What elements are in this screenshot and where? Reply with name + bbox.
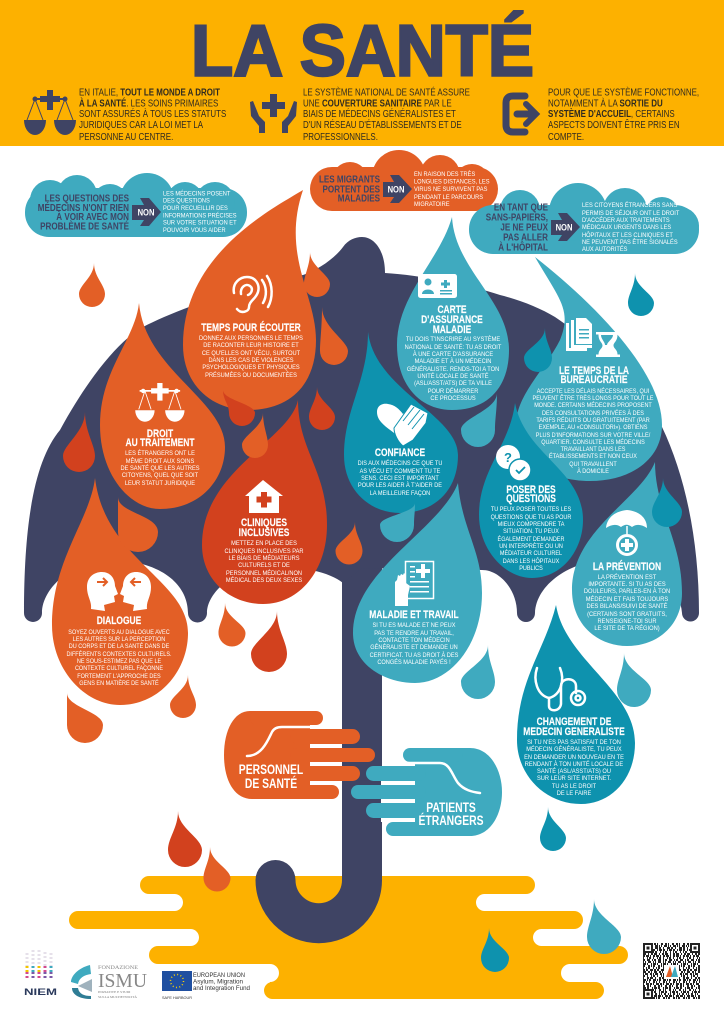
heading: CONFIANCE xyxy=(375,447,426,459)
cloud heading: MÉDECINS N'ONT RIEN xyxy=(38,202,129,213)
body text: SENS. CECI EST IMPORTANT xyxy=(361,476,439,482)
cloud body: PENDANT LE PARCOURS xyxy=(414,195,483,201)
body text: DANS LES HÔPITAUX xyxy=(503,558,559,565)
body text: PEUVENT ÊTRE TRÈS LONGS POUR TOUT LE xyxy=(533,394,654,402)
logo: European Union: and Integration Fund xyxy=(193,985,250,992)
body text: CONGÉS MALADIE PAYÉS ! xyxy=(377,659,451,666)
body text: SI TU ES MALADE ET NE PEUX xyxy=(372,623,456,629)
heading: MALADIE ET TRAVAIL xyxy=(369,609,459,621)
icon: umbrella and cross xyxy=(606,510,647,554)
body text: UNITÉ LOCALE DE SANTÉ xyxy=(417,373,489,380)
cloud body: POUVOIR VOUS AIDER xyxy=(163,228,226,234)
heading: TEMPS POUR ÉCOUTER xyxy=(201,321,301,334)
body text: MÊME DROIT AUX SOINS xyxy=(126,457,194,465)
body text: MONDE. CERTAINS MÉDECINS PROPOSENT xyxy=(534,402,652,409)
body text: DIS AUX MÉDECINS CE QUE TU xyxy=(358,460,442,467)
body text: DANS LES CAS DE VIOLENCES xyxy=(208,358,294,364)
header text: middle: LE SYSTÈME NATIONAL DE SANTÉ ASSURE xyxy=(303,87,470,98)
header text: left: JURIDIQUES CAR LA LOI MET LA xyxy=(79,119,203,130)
body text: LE SITE DE TA RÉGION) xyxy=(594,625,660,632)
body text: SOYEZ OUVERTS AU DIALOGUE AVEC xyxy=(68,630,170,636)
body text: ACCEPTE LES DÉLAIS NÉCESSAIRES, QUI xyxy=(537,388,650,395)
logo: NIEM: NIEM xyxy=(24,987,57,998)
cloud body: MIGRATOIRE xyxy=(414,202,450,208)
header text: left: . LES SOINS PRIMAIRES xyxy=(126,98,218,109)
decorative dark teal drops xyxy=(481,273,682,972)
body text: RENDANT À TON UNITÉ LOCALE DE xyxy=(525,761,623,768)
cloud: migrants myth xyxy=(310,150,498,211)
heading: CARTE xyxy=(437,304,467,316)
header text: middle: COUVERTURE SANITAIRE PAR LE xyxy=(322,98,452,109)
body text: TARIFS RÉDUITS OU GRATUITEMENT (PAR xyxy=(536,417,650,424)
icon: clinic house xyxy=(245,480,283,513)
header text: right: ASPECTS DOIVENT ÊTRE PRIS EN xyxy=(548,119,680,130)
body text: CERTIFICAT. TU AS DROIT À DES xyxy=(370,652,458,659)
cloud heading: À VOIR AVEC MON xyxy=(56,211,129,222)
header text: middle: BIAIS DE MÉDECINS GÉNÉRALISTES ET xyxy=(303,108,456,119)
body text: CITOYENS, QUEL QUE SOIT xyxy=(122,473,199,479)
icon: chat bubbles xyxy=(496,445,531,481)
body text: GENS EN MATIÈRE DE SANTÉ xyxy=(79,680,159,687)
body text: (CERTAINS SONT GRATUITS, xyxy=(587,612,667,618)
logo: European Union: SAFE HARBOUR xyxy=(162,996,192,1000)
decorative orange drops xyxy=(67,252,362,892)
non arrow xyxy=(551,213,580,241)
body text: QUI TRAVAILLENT xyxy=(569,462,617,468)
header text: right: POUR QUE LE SYSTÈME FONCTIONNE, xyxy=(548,87,699,98)
heading: AU TRAITEMENT xyxy=(125,437,195,449)
cloud body: HÔPITAUX ET LES CLINIQUES ET xyxy=(582,232,673,239)
panel: la prévention xyxy=(572,462,682,646)
body text: MÉDECIN GÉNÉRALISTE, TU PEUX xyxy=(526,746,622,753)
body text: SUR LEUR SITE INTERNET. xyxy=(537,776,611,782)
cloud body: NE PEUVENT PAS ÊTRE SIGNALÉS xyxy=(582,238,678,246)
body text: NE SOUS-ESTIMEZ PAS QUE LE xyxy=(77,659,161,665)
heading: CLINIQUES xyxy=(241,517,287,529)
body text: TRAVAILLANT DANS LES xyxy=(561,447,626,453)
body text: GÉNÉRALISTE. RENDS-TOI A TON xyxy=(407,366,499,373)
cloud body: AUX AUTORITÉS xyxy=(582,246,628,253)
heading: LE TEMPS DE LA xyxy=(559,365,629,377)
panel: carte d'assurance maladie xyxy=(397,217,509,410)
body text: AS VÉCU ET COMMENT TU TE xyxy=(360,468,440,475)
body text: NATIONAL DE SANTÉ: TU AS DROIT xyxy=(405,344,502,351)
body text: PLUS D'INFORMATIONS SUR VOTRE VILLE/ xyxy=(536,433,651,439)
logo: Fondazione ISMU: ISMU xyxy=(98,970,148,992)
header text: right: SORTIE DU xyxy=(620,98,663,109)
body text: DES CONSULTATIONS PRIVÉES À DES xyxy=(542,410,644,417)
cloud: undocumented myth xyxy=(469,183,699,254)
logo: Fondazione ISMU: FONDAZIONE xyxy=(98,965,139,971)
decorative teal drops xyxy=(380,393,651,954)
body text: DE LE FAIRE xyxy=(557,791,591,797)
body text: RENSEIGNE-TOI SUR xyxy=(597,619,657,625)
heading: LA PRÉVENTION xyxy=(593,560,661,573)
logo: European Union: Asylum, Migration xyxy=(193,978,243,986)
body text: MALADIE ET À UN MÉDECIN xyxy=(415,358,491,365)
cloud body: LONGUES DISTANCES, LES xyxy=(414,179,490,186)
header text: middle: UNE xyxy=(303,98,322,109)
body text: UN INTERPRÈTE OU UN xyxy=(499,543,563,550)
heading: BUREAUCRATIE xyxy=(560,374,628,386)
icon: scales xyxy=(135,383,185,422)
body text: MÉDECIN ET FAIS TOUJOURS xyxy=(586,596,668,603)
cloud heading: EN TANT QUE xyxy=(494,202,548,213)
label: PERSONNEL xyxy=(239,761,304,777)
title: LA SANTÉ xyxy=(191,12,534,92)
body text: LA PRÉVENTION EST xyxy=(598,574,657,581)
body text: METTEZ EN PLACE DES xyxy=(231,541,297,547)
header text: middle: D'UN RÉSEAU D'ÉTABLISSEMENTS ET DE xyxy=(303,119,462,130)
heading: DROIT xyxy=(147,428,173,440)
body text: À UNE CARTE D'ASSURANCE xyxy=(413,351,493,358)
heading: MALADIE xyxy=(433,324,472,336)
cloud body: LES MÉDECINS POSENT xyxy=(163,190,231,198)
cloud heading: JE NE PEUX xyxy=(500,222,548,233)
icon: heart and hand xyxy=(377,404,428,446)
header text: right: SYSTÈME D'ACCUEIL xyxy=(548,108,631,119)
panel: le temps de la bureaucratie xyxy=(516,257,662,481)
cloud body: POUR RECUEILLIR DES xyxy=(163,206,228,212)
header text: left: EN ITALIE, xyxy=(79,87,120,98)
header text: right: NOTAMMENT À LA xyxy=(548,98,620,109)
body text: (ASL/ASST/ATS) DE TA VILLE xyxy=(414,381,492,387)
panel: confiance xyxy=(344,332,458,513)
cloud heading: PROBLÈME DE SANTÉ xyxy=(40,221,129,232)
cloud body: LES CITOYENS ÉTRANGERS SANS xyxy=(582,202,678,209)
cloud heading: PAS ALLER xyxy=(503,232,548,243)
hand: personnel de santé xyxy=(224,711,375,799)
body text: TU DOIS T'INSCRIRE AU SYSTÈME xyxy=(406,336,500,343)
icon: documents and hourglass xyxy=(566,318,620,357)
heading: INCLUSIVES xyxy=(239,527,290,539)
icon: chat bubbles: ? xyxy=(504,450,512,465)
body text: CLINIQUES INCLUSIVES PAR xyxy=(225,549,303,555)
puddle xyxy=(69,876,651,999)
header text: right: COMPTE. xyxy=(548,131,584,142)
body text: PSYCHOLOGIQUES ET PHYSIQUES xyxy=(202,365,300,371)
body text: CE PROCESSUS xyxy=(430,396,476,402)
header text: left: À LA SANTÉ xyxy=(79,98,126,109)
body text: LEUR STATUT JURIDIQUE xyxy=(125,481,195,487)
body text: PRÉSUMÉES OU DOCUMENTÉES xyxy=(205,372,297,379)
body text: FORTEMENT L'APPROCHE DES xyxy=(77,674,161,680)
body text: SANTÉ (ASL/ASST/ATS) OU xyxy=(537,768,611,775)
body text: MÉDICAL DES DEUX SEXES xyxy=(226,577,302,584)
non arrow: NON xyxy=(388,184,404,195)
body text: EN DEMANDER UN NOUVEAU EN TE xyxy=(524,755,624,761)
body text: POUR LES AIDER À T'AIDER DE xyxy=(358,482,442,489)
body text: LA MEILLEURE FAÇON xyxy=(370,491,430,497)
body text: DONNEZ AUX PERSONNES LE TEMPS xyxy=(199,336,303,342)
logo: European Union xyxy=(162,971,250,1000)
icon: stethoscope xyxy=(536,668,585,710)
body text: LES ÉTRANGERS ONT LE xyxy=(125,450,195,457)
cloud body: INFORMATIONS PRÉCISES xyxy=(163,212,237,220)
logo: NIEM xyxy=(24,950,57,998)
icon: medical certificate in hand xyxy=(395,562,434,606)
body text: CULTURELS ET DE xyxy=(238,563,290,569)
cloud body: EN RAISON DES TRÈS xyxy=(414,171,475,178)
body text: DE RACONTER LEUR HISTOIRE ET xyxy=(203,343,299,349)
header text: middle: PROFESSIONNELS. xyxy=(303,131,378,142)
body text: DE SANTÉ QUE LES AUTRES xyxy=(120,465,200,472)
heading: D'ASSURANCE xyxy=(421,314,483,326)
panel: cliniques inclusives xyxy=(202,400,327,604)
panel: temps pour écouter xyxy=(183,190,316,410)
header text: left: PERSONNE AU CENTRE. xyxy=(79,131,173,142)
body text: CE QU'ELLES ONT VÉCU, SURTOUT xyxy=(202,350,301,357)
body text: LE BIAIS DE MÉDIATEURS xyxy=(228,555,300,562)
body text: PERSONNEL MÉDICAL/NON xyxy=(226,570,302,577)
cloud body: D'ACCÉDER AUX TRAITEMENTS xyxy=(582,217,670,224)
logo: Fondazione ISMU: INIZIATIVE E STUDI xyxy=(98,990,131,994)
umbrella canopy xyxy=(24,237,699,622)
QR code xyxy=(643,943,700,999)
icon: scales of justice xyxy=(24,90,76,135)
body text: IMPORTANTE. SI TU AS DES xyxy=(588,582,666,588)
body text: CONTACTE TON MÉDECIN xyxy=(378,637,450,644)
body text: TU PEUX POSER TOUTES LES xyxy=(491,507,571,513)
cloud body: DES QUESTIONS xyxy=(163,198,210,205)
label: PATIENTS xyxy=(426,799,476,815)
heading: CHANGEMENT DE xyxy=(537,716,612,728)
logo: Fondazione ISMU xyxy=(71,965,148,999)
body text: QUESTIONS QUE TU AS POUR xyxy=(491,515,571,521)
icon: ear xyxy=(234,276,272,312)
body text: DIFFÉRENTS CONTEXTES CULTURELS. xyxy=(66,651,172,658)
panel: maladie et travail xyxy=(353,483,482,683)
cloud heading: SANS-PAPIERS, xyxy=(486,212,548,223)
panel: changement de médecin généraliste xyxy=(517,605,635,804)
heading: QUESTIONS xyxy=(506,493,556,505)
body text: DOULEURS, PARLES-EN À TON xyxy=(584,588,670,595)
heading: MEDECIN GENERALISTE xyxy=(523,726,625,738)
body text: GÉNÉRALISTE ET DEMANDE UN xyxy=(370,644,458,651)
logo: Fondazione ISMU: SULLA MULTIETNICITÀ xyxy=(98,994,137,999)
cloud heading: À L'HÔPITAL xyxy=(498,241,548,253)
body text: PAS TE RENDRE AU TRAVAIL, xyxy=(374,631,454,637)
icon: two heads facing xyxy=(87,572,151,611)
cloud body: MÉDICAUX URGENTS DANS LES xyxy=(582,224,671,231)
heading: POSER DES xyxy=(506,484,556,496)
body text: LES AUTRES SUR LA PERCEPTION xyxy=(73,637,165,643)
body text: DES BILANS/SUIVI DE SANTÉ xyxy=(587,603,668,610)
body text: SITUATION. TU PEUX xyxy=(503,529,559,535)
heading: DIALOGUE xyxy=(97,615,142,627)
non arrow xyxy=(383,175,412,203)
non arrow: NON xyxy=(556,222,572,233)
header text: right: , CERTAINS xyxy=(631,108,675,119)
body text: EXEMPLE, AU «CONSULTORI»). OBTIENS xyxy=(539,425,648,431)
decorative dark orange drops xyxy=(63,387,335,867)
body text: CONTEXTE CULTUREL FAÇONNE xyxy=(75,666,163,672)
cloud body: PERMIS DE SÉJOUR ONT LE DROIT xyxy=(582,210,680,217)
umbrella shaft and hook xyxy=(276,560,362,923)
non arrow: NON xyxy=(138,207,154,218)
label: ÉTRANGERS xyxy=(419,811,483,828)
body text: POUR DÉMARRER xyxy=(428,388,478,395)
cloud body: VIRUS NE SURVIVENT PAS xyxy=(414,187,487,193)
cloud body: SUR VOTRE SITUATION ET xyxy=(163,220,237,227)
body text: À DOMICILE xyxy=(577,468,609,475)
body text: DU CORPS ET DE LA SANTÉ DANS DE xyxy=(69,643,169,650)
header band xyxy=(0,0,724,146)
panel: poser des questions xyxy=(479,403,583,578)
body text: TU AS LE DROIT xyxy=(552,784,597,790)
body text: MIEUX COMPRENDRE TA xyxy=(498,522,565,528)
non arrow xyxy=(132,198,161,226)
panel: dialogue xyxy=(52,478,188,705)
cloud heading: PORTENT DES xyxy=(323,184,380,195)
header text: left: TOUT LE MONDE A DROIT xyxy=(120,87,220,98)
cloud heading: LES MIGRANTS xyxy=(319,174,380,185)
body text: QUARTIER. CONSULTE LES MÉDECINS xyxy=(541,439,645,446)
body text: ÉGALEMENT DEMANDER xyxy=(498,536,564,543)
panel: droit au traitement xyxy=(100,303,225,509)
body text: ÉTABLISSEMENTS ET NON CEUX xyxy=(549,453,637,460)
icon: hands holding cross xyxy=(250,94,297,133)
cloud heading: MALADIES xyxy=(338,193,380,204)
body text: SI TU N'ES PAS SATISFAIT DE TON xyxy=(527,740,621,746)
logo: European Union: EUROPEAN UNION xyxy=(193,972,245,979)
icon: exit arrow xyxy=(506,96,536,132)
cloud heading: LES QUESTIONS DES xyxy=(45,193,129,204)
body text: MÉDIATEUR CULTUREL xyxy=(500,550,562,557)
icon: insurance card xyxy=(418,274,457,298)
header text: left: SONT ASSURÉS À TOUS LES STATUTS xyxy=(79,108,226,119)
cloud: questions myth xyxy=(25,173,247,237)
label: DE SANTÉ xyxy=(245,774,297,791)
body text: PUBLICS xyxy=(519,566,543,572)
hand: patients étrangers xyxy=(351,748,502,836)
